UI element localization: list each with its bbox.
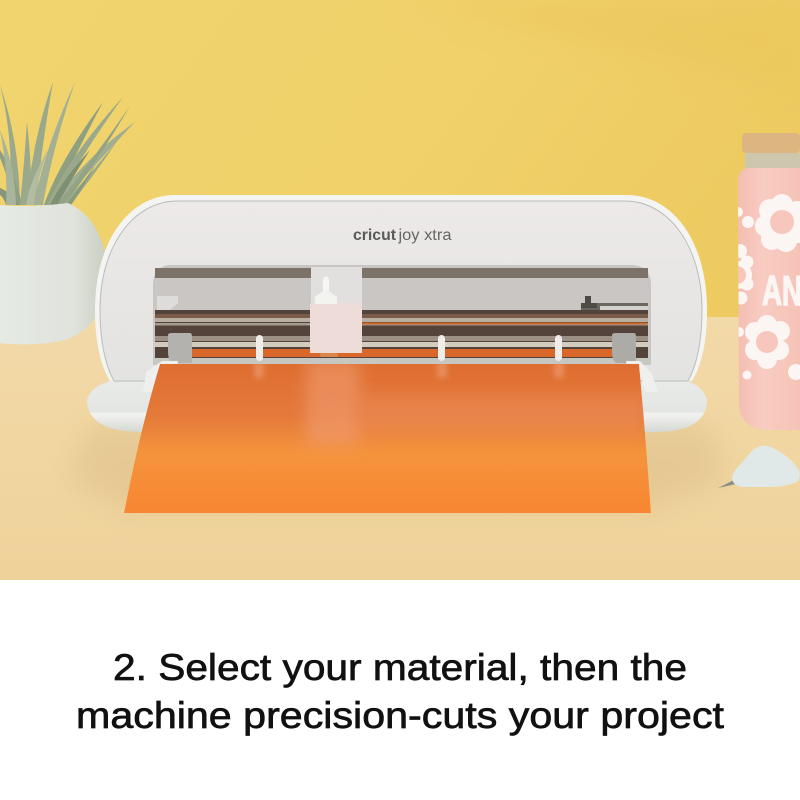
flower large lower — [745, 315, 790, 369]
wall background — [0, 0, 800, 320]
air plant — [0, 82, 135, 205]
wooden table — [0, 317, 800, 580]
jar decorations — [738, 194, 800, 380]
round pot — [0, 203, 107, 344]
vinyl surface — [124, 364, 651, 513]
tool handle — [732, 446, 800, 487]
vinyl wheel reflections — [254, 362, 564, 378]
machine shadow on table — [70, 425, 725, 510]
lower rod — [153, 342, 650, 347]
small flowers — [733, 207, 800, 380]
star wheel 2 — [438, 335, 445, 361]
carriage lower — [310, 303, 362, 353]
front opening — [153, 265, 651, 365]
left paper clip — [143, 361, 178, 392]
vinyl sheen — [360, 395, 650, 431]
blade tip — [320, 353, 338, 357]
flower large top — [755, 194, 800, 252]
top shadow band — [155, 268, 648, 278]
vinyl highlight — [306, 360, 360, 445]
wall shadow — [400, 0, 800, 90]
machine brand logo: cricut — [353, 227, 396, 244]
right bracket — [581, 303, 648, 312]
inner mechanism — [155, 310, 648, 362]
caption line 1: 2. Select your material, then the — [113, 647, 687, 688]
carriage knob cone — [315, 291, 337, 304]
white caption panel — [0, 580, 800, 800]
caption heading — [76, 647, 725, 736]
jar lid — [742, 133, 800, 153]
carriage upper — [311, 267, 362, 307]
tool needle — [718, 480, 736, 488]
flower left partial — [738, 244, 754, 304]
orange reflection upper — [362, 322, 647, 324]
jar glass neck — [745, 153, 800, 170]
machine model name: joy xtra — [397, 227, 452, 244]
star wheel 3 — [555, 335, 562, 361]
lower bar — [155, 336, 648, 341]
front metal lip — [153, 358, 651, 363]
left paper tray — [87, 378, 165, 432]
right paper tray — [635, 378, 707, 432]
right grey roller — [612, 333, 636, 363]
carriage — [310, 267, 362, 357]
cutting machine — [87, 195, 707, 513]
back wall — [155, 278, 648, 310]
star wheel 1 — [256, 335, 263, 361]
body inner face — [100, 201, 702, 381]
seam tool — [718, 446, 800, 488]
left grey roller — [168, 333, 192, 363]
jar — [738, 133, 800, 430]
machine body — [95, 195, 707, 381]
carriage knob post — [323, 276, 329, 292]
right paper clip — [626, 361, 658, 392]
caption line 2: machine precision-cuts your project — [76, 695, 725, 736]
orange material band — [190, 349, 615, 357]
upper rail — [155, 318, 648, 322]
jar body — [738, 168, 800, 430]
left latch — [157, 296, 178, 310]
orange vinyl sheet — [124, 360, 651, 513]
